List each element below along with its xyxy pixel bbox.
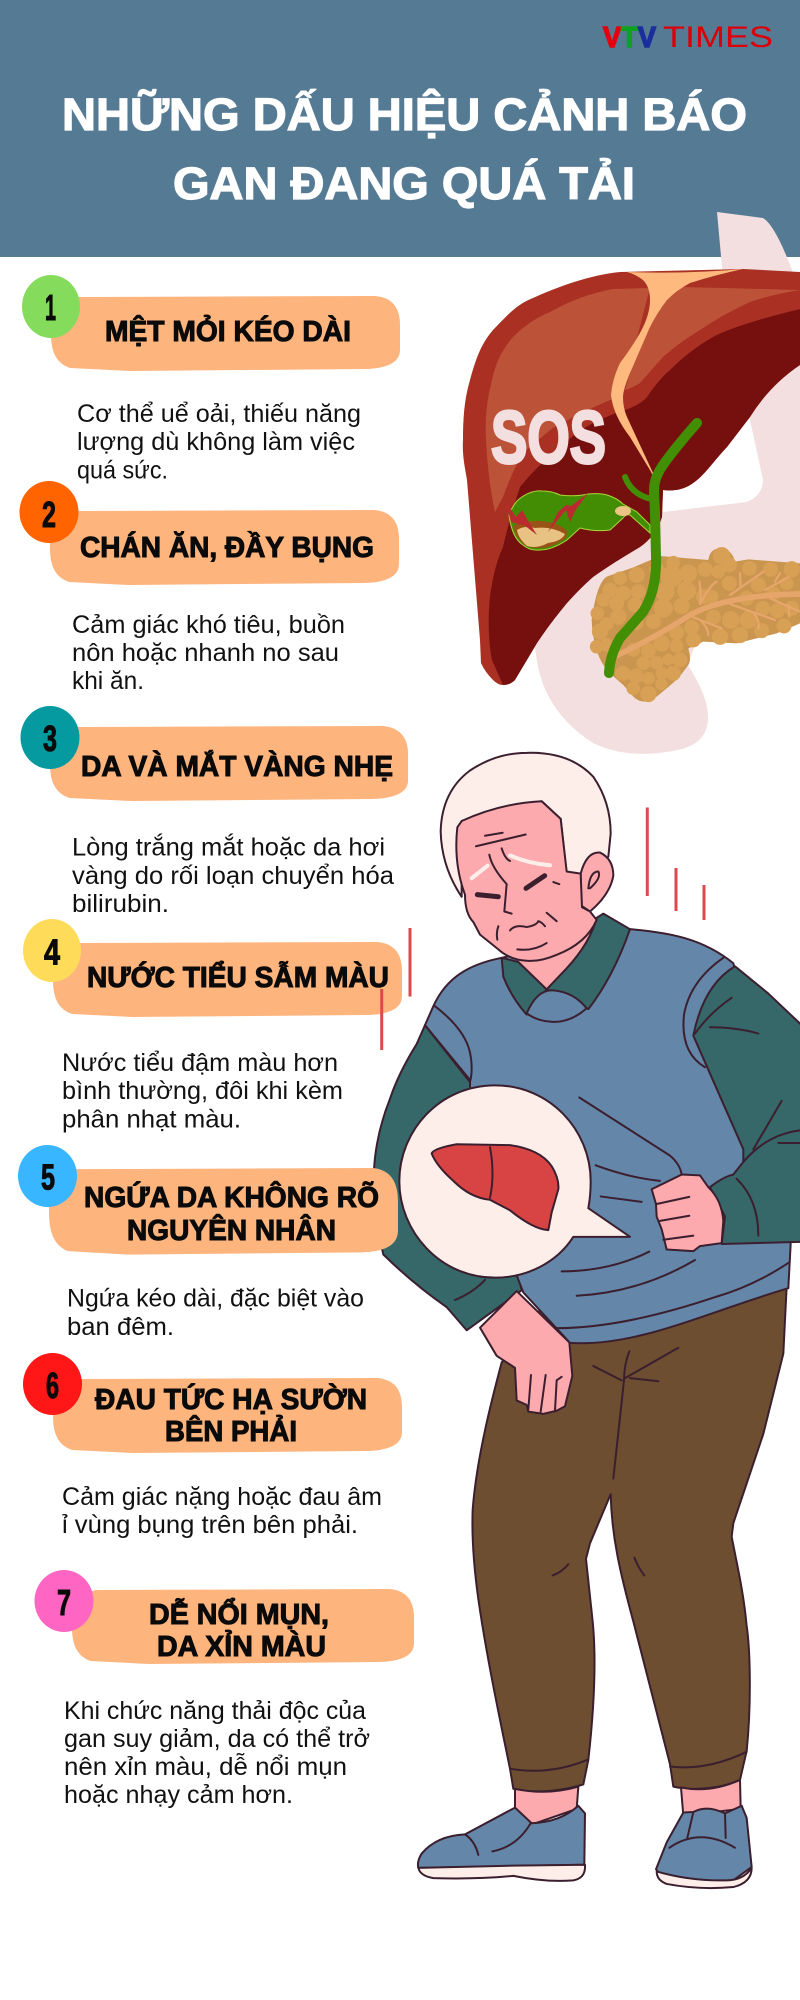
heading 4: NƯỚC TIỂU SẪM MÀU [87,960,389,994]
pill: heading 3 [50,726,408,801]
item 7 [34,1570,414,1809]
heading 7 [149,1597,329,1663]
number 3: 3 [43,718,57,759]
description 4: Nước tiểu đậm màu hơn [62,1049,338,1077]
pancreas [591,548,800,702]
item 2 [20,481,399,695]
description 1: Cơ thể uể oải, thiếu năng [77,400,361,428]
description 5 [67,1284,364,1341]
number 1: 1 [45,287,56,328]
eyebrows [472,856,550,878]
left sleeve [374,1025,522,1330]
heading 1: MỆT MỎI KÉO DÀI [105,314,351,348]
description 2 [72,611,345,695]
description 2: khi ăn. [72,667,144,695]
upper body [374,753,800,1343]
number 2: 2 [42,494,56,535]
description 3 [72,832,394,918]
description 2: nôn hoặc nhanh no sau [72,639,339,667]
liver [463,269,800,685]
description 6: ỉ vùng bụng trên bên phải. [62,1511,358,1539]
left forearm and hand [480,1291,572,1414]
stomach silhouette [530,212,800,754]
trousers and shoes [418,1273,787,1888]
description 2: Cảm giác khó tiêu, buồn [72,611,345,639]
number badge 5 [18,1145,77,1207]
description 4: phân nhạt màu. [62,1106,241,1134]
pill: heading 5 [49,1168,398,1255]
description 7: nên xỉn màu, dễ nổi mụn [64,1752,347,1781]
bile duct [609,423,697,673]
ankles [515,1780,741,1825]
heading 6 [95,1382,367,1448]
item 6 [23,1353,402,1539]
logo: VTV Times [603,21,773,54]
heading 7: DỄ NỔI MỤN, [149,1597,329,1631]
item 4 [23,919,402,1134]
description 1: lượng dù không làm việc [77,428,355,456]
pain marks: red lines [382,808,704,1050]
sweater [425,929,791,1343]
speech bubble [399,1085,630,1278]
pill: heading 2 [50,510,399,585]
hair [441,753,611,897]
title [62,89,747,209]
heading 6: BÊN PHẢI [165,1414,297,1448]
pill: heading 4 [53,942,402,1017]
description 3: bilirubin. [72,890,169,918]
right shoe [656,1806,752,1881]
header band [0,0,800,257]
description 7 [64,1697,370,1809]
pill: heading 6 [53,1378,402,1453]
logo: VTV Times: TIMES [663,21,773,54]
neck [518,905,597,989]
item 3 [20,706,408,918]
description 3: vàng do rối loạn chuyển hóa [72,862,394,890]
heading 5: NGUYÊN NHÂN [127,1213,336,1247]
number 5: 5 [41,1156,55,1198]
face [456,801,597,961]
heading 2: CHÁN ĂN, ĐẦY BỤNG [80,530,374,564]
SOS label: SOS [491,396,606,479]
item 5 [18,1145,398,1341]
ear [581,853,613,912]
number 6: 6 [46,1365,59,1406]
collar [502,958,547,1015]
heading 5: NGỨA DA KHÔNG RÕ [84,1180,379,1214]
description 7: Khi chức năng thải độc của [64,1697,366,1725]
heading 6: ĐAU TỨC HẠ SƯỜN [95,1382,367,1416]
number badge 6 [23,1353,82,1415]
left shoe [418,1806,585,1868]
logo: VTV Times: VTV [603,22,657,54]
description 7: gan suy giảm, da có thể trở [64,1725,370,1753]
title: GAN ĐANG QUÁ TẢI [173,158,635,209]
number badge 3 [20,706,80,769]
description 4: bình thường, đôi khi kèm [62,1077,343,1105]
number badge 7 [34,1570,94,1632]
description 4 [62,1049,343,1134]
heading 7: DA XỈN MÀU [157,1629,326,1663]
gallbladder with stones [505,491,650,550]
pill: heading 7 [72,1589,414,1664]
illustration: digestive organs with liver [463,212,800,754]
trousers [472,1273,787,1791]
description 6: Cảm giác nặng hoặc đau âm [62,1483,382,1511]
description 7: hoặc nhạy cảm hơn. [64,1781,293,1809]
illustration: elderly man holding his side [374,753,800,1888]
number badge 2 [20,481,78,543]
number 7: 7 [57,1582,71,1623]
item 1 [22,275,400,484]
pill: heading 1 [51,296,400,371]
description 5: ban đêm. [67,1313,174,1341]
heading 5 [84,1180,379,1247]
bubble liver icon [432,1144,558,1230]
number badge 1 [22,275,80,338]
description 1 [77,400,361,484]
description 5: Ngứa kéo dài, đặc biệt vào [67,1284,364,1312]
title: NHỮNG DẤU HIỆU CẢNH BÁO [62,89,747,140]
right hand [652,1175,723,1251]
right sleeve [693,966,800,1244]
number badge 4 [23,919,81,982]
description 1: quá sức. [77,456,168,484]
description 3: Lòng trắng mắt hoặc da hơi [72,832,385,862]
description 6 [62,1483,382,1539]
heading 3: DA VÀ MẮT VÀNG NHẸ [81,749,393,783]
number 4: 4 [44,932,60,972]
